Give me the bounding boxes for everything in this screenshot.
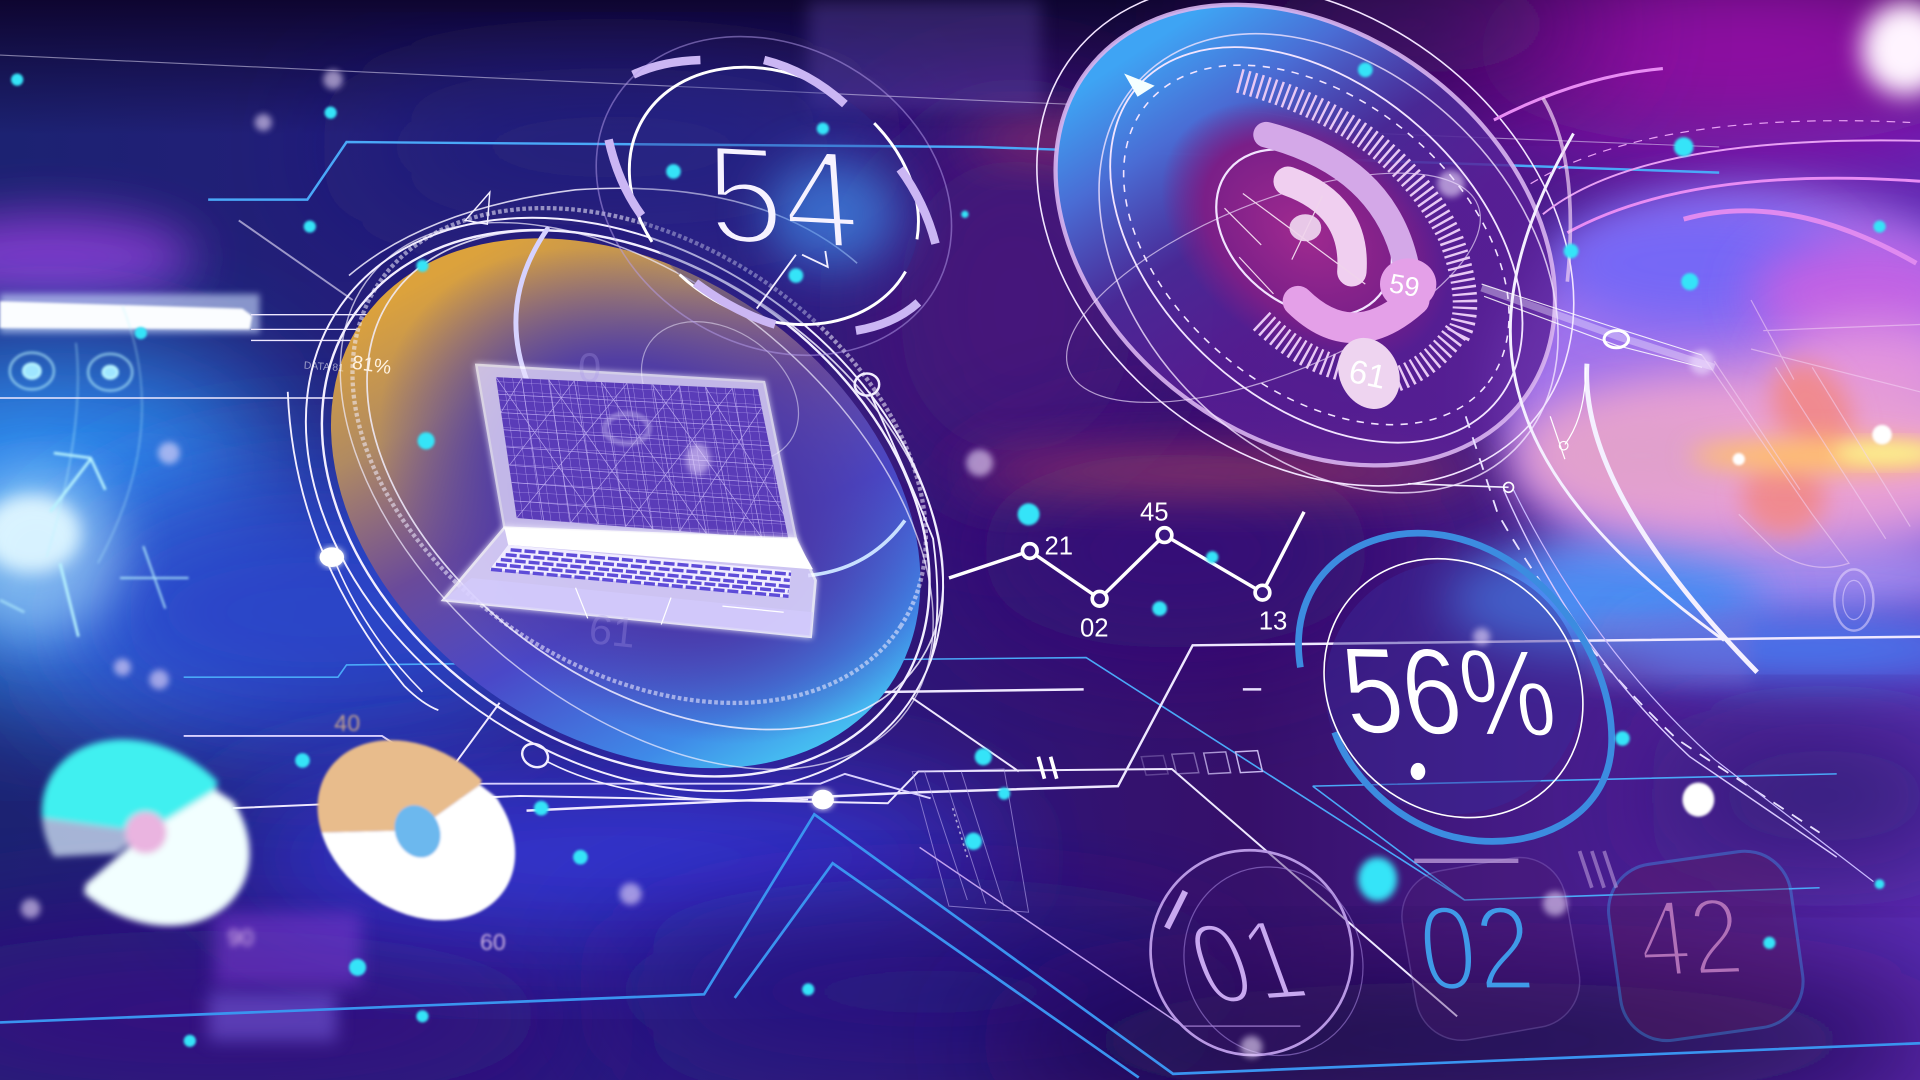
counter 01: 01 — [1173, 895, 1321, 1028]
disc nodes — [320, 373, 879, 809]
dial centre — [1289, 214, 1321, 241]
badge 59 — [1380, 258, 1436, 310]
laptop wireframe icon — [443, 365, 816, 637]
badge 61 — [1327, 328, 1411, 419]
progress squares — [1038, 751, 1262, 779]
gauge 54 — [595, 36, 952, 356]
dial thick arcs — [1266, 135, 1414, 328]
small grid panel — [912, 769, 1029, 912]
scale labels — [228, 710, 506, 955]
gauge rings — [1271, 505, 1636, 871]
counter 42: 42 — [1631, 875, 1749, 1001]
faint binary digits: 0 — [578, 344, 601, 391]
counter 02 — [1401, 856, 1580, 1041]
chart labels: 13 — [1259, 607, 1287, 635]
scale labels: 40 — [334, 710, 360, 736]
dial hatch arcs — [1239, 81, 1465, 382]
value 54: 54 — [701, 114, 864, 279]
scale labels: 90 — [228, 924, 254, 950]
gauge 56% — [1242, 530, 1615, 845]
laptop base and keyboard — [443, 528, 816, 637]
laptop screen — [476, 365, 796, 540]
gauge rings — [538, 0, 1010, 418]
line chart — [949, 498, 1304, 643]
value 56%: 56% — [1334, 622, 1564, 763]
right arcs and wire plane — [1408, 69, 1920, 882]
dial pointer — [1124, 73, 1155, 97]
target dial disc — [938, 0, 1673, 590]
counter 02: 02 — [1413, 882, 1539, 1015]
faint binary digits: 61 — [587, 605, 638, 657]
dial cross-hair — [1224, 193, 1365, 294]
data readout 81% — [303, 352, 393, 379]
badge 59: 59 — [1387, 268, 1422, 303]
chart labels: 21 — [1044, 533, 1073, 561]
counter 01 — [1149, 848, 1364, 1056]
badge 61: 61 — [1346, 353, 1389, 397]
disc rings — [196, 99, 1053, 910]
chart markers — [1022, 528, 1270, 606]
chart labels: 02 — [1080, 615, 1109, 643]
scale labels: 60 — [480, 929, 506, 955]
pie chart orange — [316, 738, 518, 922]
left icons — [0, 306, 189, 637]
data readout 81%: 81% — [351, 352, 393, 379]
chart labels — [1044, 498, 1287, 643]
counter 42 — [1580, 845, 1809, 1047]
chart labels: 45 — [1140, 498, 1169, 526]
left light streak and bright bar — [0, 294, 260, 637]
dial rings — [938, 0, 1673, 590]
faint binary digits — [578, 344, 638, 657]
laptop disc — [196, 99, 1053, 910]
data readout 81%: DATA 81 — [303, 361, 344, 374]
white node dots — [1682, 425, 1892, 817]
pie chart cyan — [36, 734, 255, 932]
